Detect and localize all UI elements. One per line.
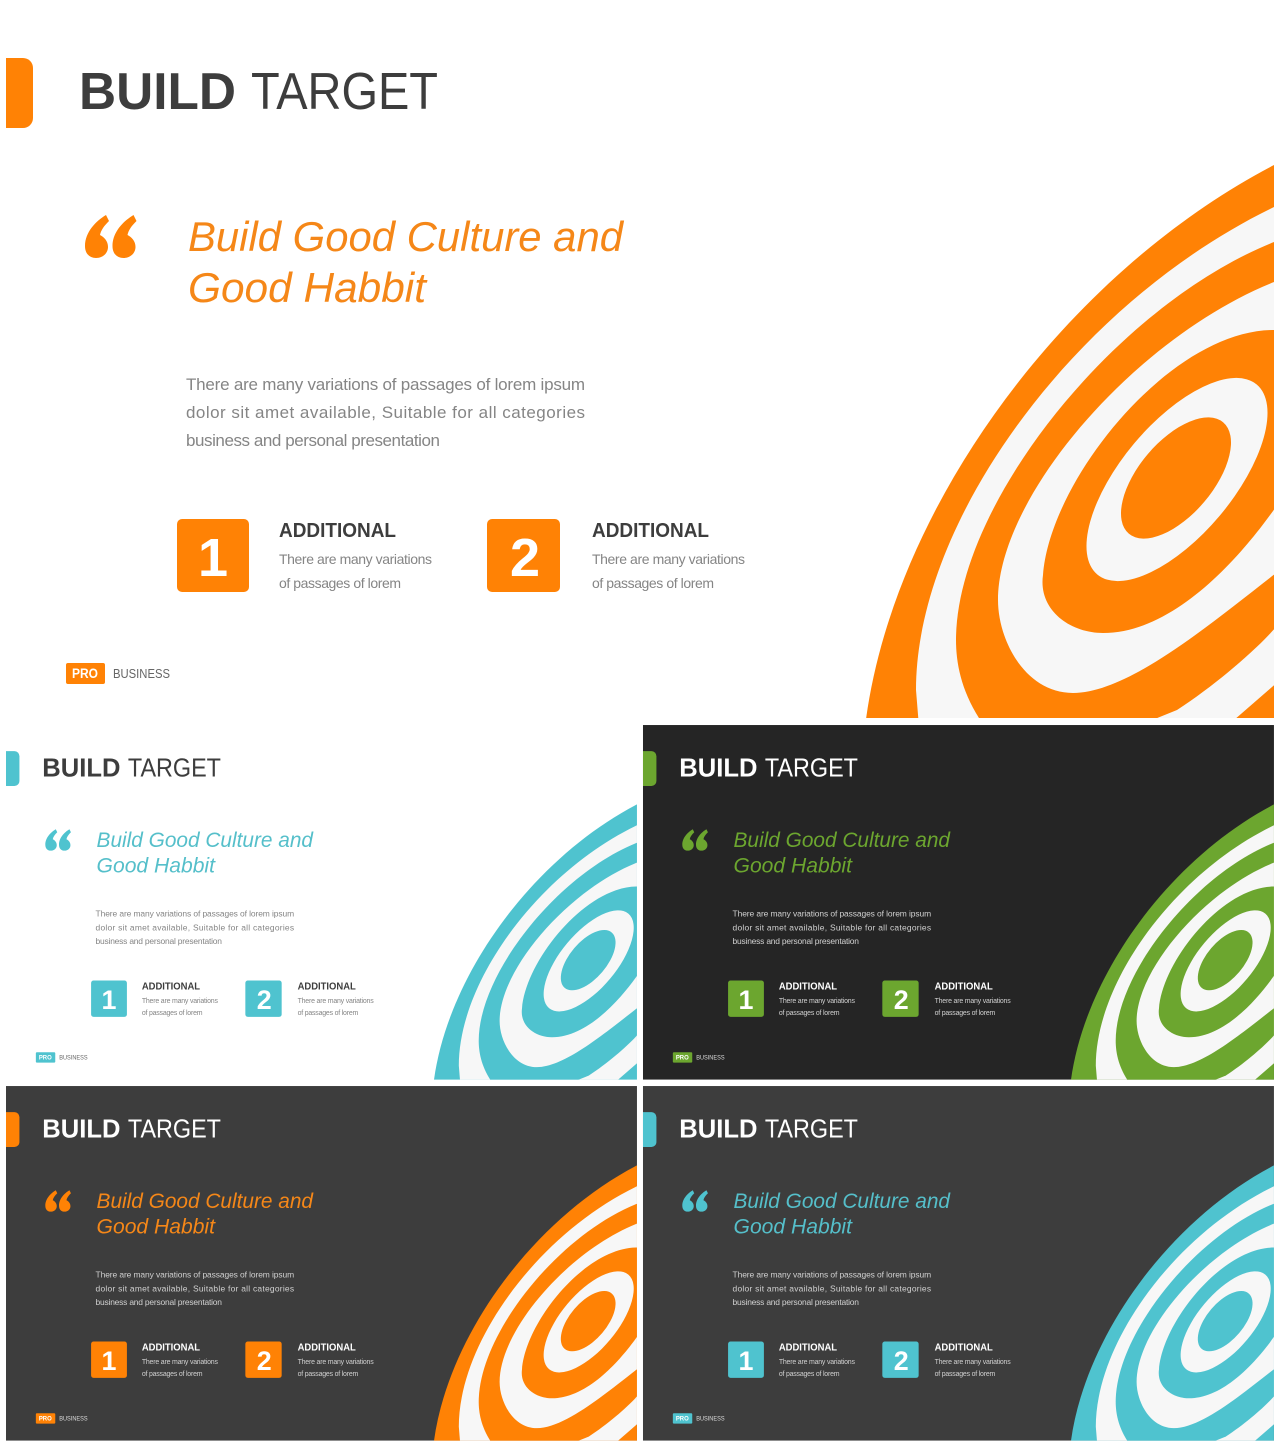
heading: build target xyxy=(679,755,858,783)
heading: build target: TARGET xyxy=(128,1116,221,1144)
icon: header tab xyxy=(6,58,33,128)
number box 1: 1 xyxy=(102,1346,117,1376)
number box 2: 2 xyxy=(894,985,909,1015)
body text xyxy=(96,1269,294,1307)
body text: There are many variations of passages of lorem ipsum xyxy=(186,375,585,394)
item 2 text: of passages of lorem xyxy=(592,575,714,591)
item 1 text xyxy=(779,1343,855,1378)
quote headline: Build Good Culture and xyxy=(97,1190,314,1213)
item 1 text: of passages of lorem xyxy=(279,575,401,591)
icon: header tab xyxy=(6,1112,19,1147)
icon: quote mark xyxy=(45,829,71,851)
item 1 text: of passages of lorem xyxy=(779,1010,840,1017)
item 2 text: ADDITIONAL xyxy=(592,520,709,542)
heading: build target: TARGET xyxy=(251,63,438,121)
body text xyxy=(186,375,585,450)
footer brand: BUSINESS xyxy=(696,1416,725,1423)
item 2 text xyxy=(298,1343,374,1378)
quote headline: Good Habbit xyxy=(97,855,216,878)
quote headline: Good Habbit xyxy=(734,855,853,878)
panel: main slide, orange on white xyxy=(6,6,1280,727)
body text: dolor sit amet available, Suitable for all categories xyxy=(733,922,931,932)
footer brand: PRO xyxy=(676,1055,689,1062)
item 2 text: ADDITIONAL xyxy=(298,1343,356,1354)
item 1 text xyxy=(279,520,432,591)
quote headline xyxy=(97,829,314,878)
quote headline: Good Habbit xyxy=(188,264,428,311)
item 1 text xyxy=(142,982,218,1017)
body text xyxy=(733,1269,931,1307)
body text: There are many variations of passages of lorem ipsum xyxy=(96,908,294,918)
body text: business and personal presentation xyxy=(733,1297,859,1307)
item 2 text: ADDITIONAL xyxy=(298,982,356,993)
number box 2 xyxy=(245,1342,282,1378)
quote headline: Good Habbit xyxy=(734,1216,853,1239)
item 2 text: There are many variations xyxy=(935,1359,1011,1366)
item 2 text: There are many variations xyxy=(935,998,1011,1005)
body text: dolor sit amet available, Suitable for all categories xyxy=(96,922,294,932)
quote headline xyxy=(734,1190,951,1239)
heading: build target: TARGET xyxy=(128,755,221,783)
footer brand: BUSINESS xyxy=(59,1055,88,1062)
body text: business and personal presentation xyxy=(96,936,222,946)
quote headline xyxy=(188,213,625,311)
body text: There are many variations of passages of lorem ipsum xyxy=(733,1269,931,1279)
body text: business and personal presentation xyxy=(96,1297,222,1307)
footer brand xyxy=(36,1413,88,1424)
item 1 text: There are many variations xyxy=(142,998,218,1005)
item 1 text: There are many variations xyxy=(779,1359,855,1366)
icon: target rings xyxy=(1070,1164,1280,1445)
quote headline: Good Habbit xyxy=(97,1216,216,1239)
body text: dolor sit amet available, Suitable for all categories xyxy=(96,1283,294,1293)
number box 1: 1 xyxy=(739,985,754,1015)
item 1 text: ADDITIONAL xyxy=(779,982,837,993)
quote headline: Build Good Culture and xyxy=(734,829,951,852)
number box 1 xyxy=(728,981,764,1017)
number box 2: 2 xyxy=(510,528,540,588)
heading: build target: BUILD xyxy=(679,1116,757,1144)
quote headline: Build Good Culture and xyxy=(97,829,314,852)
body text xyxy=(733,908,931,946)
panel: small slide, teal on white xyxy=(6,751,637,1080)
icon: target rings xyxy=(1070,803,1280,1084)
item 2 text xyxy=(935,1343,1011,1378)
item 2 text: ADDITIONAL xyxy=(935,982,993,993)
icon: quote mark xyxy=(45,1190,71,1212)
number box 1: 1 xyxy=(739,1346,754,1376)
heading: build target: BUILD xyxy=(42,755,120,783)
item 2 text: of passages of lorem xyxy=(298,1010,359,1017)
number box 2 xyxy=(882,1342,919,1378)
heading: build target xyxy=(42,755,221,783)
quote headline: Build Good Culture and xyxy=(734,1190,951,1213)
heading: build target: TARGET xyxy=(765,1116,858,1144)
quote headline xyxy=(97,1190,314,1239)
number box 1: 1 xyxy=(102,985,117,1015)
icon: quote mark xyxy=(682,829,708,851)
icon: header tab xyxy=(643,1112,656,1147)
quote headline: Build Good Culture and xyxy=(188,213,625,260)
item 2 text xyxy=(592,520,745,591)
item 2 text: of passages of lorem xyxy=(298,1371,359,1378)
heading: build target: BUILD xyxy=(679,755,757,783)
icon: target rings xyxy=(433,1164,650,1445)
quote headline xyxy=(734,829,951,878)
number box 2 xyxy=(882,981,919,1017)
item 1 text: There are many variations xyxy=(142,1359,218,1366)
footer brand xyxy=(66,663,170,684)
icon: header tab xyxy=(643,751,656,786)
body text: dolor sit amet available, Suitable for all categories xyxy=(733,1283,931,1293)
item 1 text: ADDITIONAL xyxy=(142,1343,200,1354)
heading: build target: BUILD xyxy=(42,1116,120,1144)
item 1 text xyxy=(779,982,855,1017)
heading: build target: TARGET xyxy=(765,755,858,783)
item 2 text: There are many variations xyxy=(298,1359,374,1366)
icon: target rings xyxy=(433,803,650,1084)
item 2 text xyxy=(298,982,374,1017)
footer brand xyxy=(673,1413,725,1424)
item 2 text: of passages of lorem xyxy=(935,1010,995,1017)
body text xyxy=(96,908,294,946)
number box 2: 2 xyxy=(257,1346,272,1376)
number box 2 xyxy=(487,519,560,592)
footer brand: PRO xyxy=(72,666,98,681)
footer brand: BUSINESS xyxy=(696,1055,725,1062)
heading: build target: BUILD xyxy=(79,63,236,121)
icon: quote mark xyxy=(682,1190,708,1212)
panel: small slide, teal on grey xyxy=(643,1086,1280,1445)
footer brand: BUSINESS xyxy=(59,1416,88,1423)
item 1 text: ADDITIONAL xyxy=(142,982,200,993)
number box 2 xyxy=(245,981,282,1017)
item 1 text: There are many variations xyxy=(279,551,432,567)
body text: business and personal presentation xyxy=(186,431,440,450)
number box 1 xyxy=(728,1342,764,1378)
item 2 text: ADDITIONAL xyxy=(935,1343,993,1354)
body text: business and personal presentation xyxy=(733,936,859,946)
footer brand: PRO xyxy=(676,1416,689,1423)
body text: dolor sit amet available, Suitable for all categories xyxy=(186,403,585,422)
number box 1: 1 xyxy=(198,528,228,588)
item 1 text: There are many variations xyxy=(779,998,855,1005)
number box 1 xyxy=(91,981,127,1017)
footer brand: PRO xyxy=(39,1055,52,1062)
number box 2: 2 xyxy=(894,1346,909,1376)
item 1 text: of passages of lorem xyxy=(142,1371,203,1378)
icon: target rings xyxy=(865,162,1280,727)
heading: build target xyxy=(679,1116,858,1144)
item 1 text: of passages of lorem xyxy=(779,1371,840,1378)
body text: There are many variations of passages of lorem ipsum xyxy=(96,1269,294,1279)
item 1 text xyxy=(142,1343,218,1378)
heading: build target xyxy=(79,63,438,121)
item 2 text xyxy=(935,982,1011,1017)
heading: build target xyxy=(42,1116,221,1144)
number box 2: 2 xyxy=(257,985,272,1015)
item 2 text: of passages of lorem xyxy=(935,1371,995,1378)
footer brand: PRO xyxy=(39,1416,52,1423)
number box 1 xyxy=(177,519,249,592)
footer brand xyxy=(36,1052,88,1063)
body text: There are many variations of passages of lorem ipsum xyxy=(733,908,931,918)
item 2 text: There are many variations xyxy=(298,998,374,1005)
footer brand: BUSINESS xyxy=(113,666,170,681)
item 1 text: of passages of lorem xyxy=(142,1010,203,1017)
item 2 text: There are many variations xyxy=(592,551,745,567)
number box 1 xyxy=(91,1342,127,1378)
icon: quote mark xyxy=(85,215,136,258)
item 1 text: ADDITIONAL xyxy=(279,520,396,542)
item 1 text: ADDITIONAL xyxy=(779,1343,837,1354)
icon: header tab xyxy=(6,751,19,786)
panel: small slide, orange on grey xyxy=(6,1086,650,1445)
panel: small slide, green on black xyxy=(643,725,1280,1084)
footer brand xyxy=(673,1052,725,1063)
